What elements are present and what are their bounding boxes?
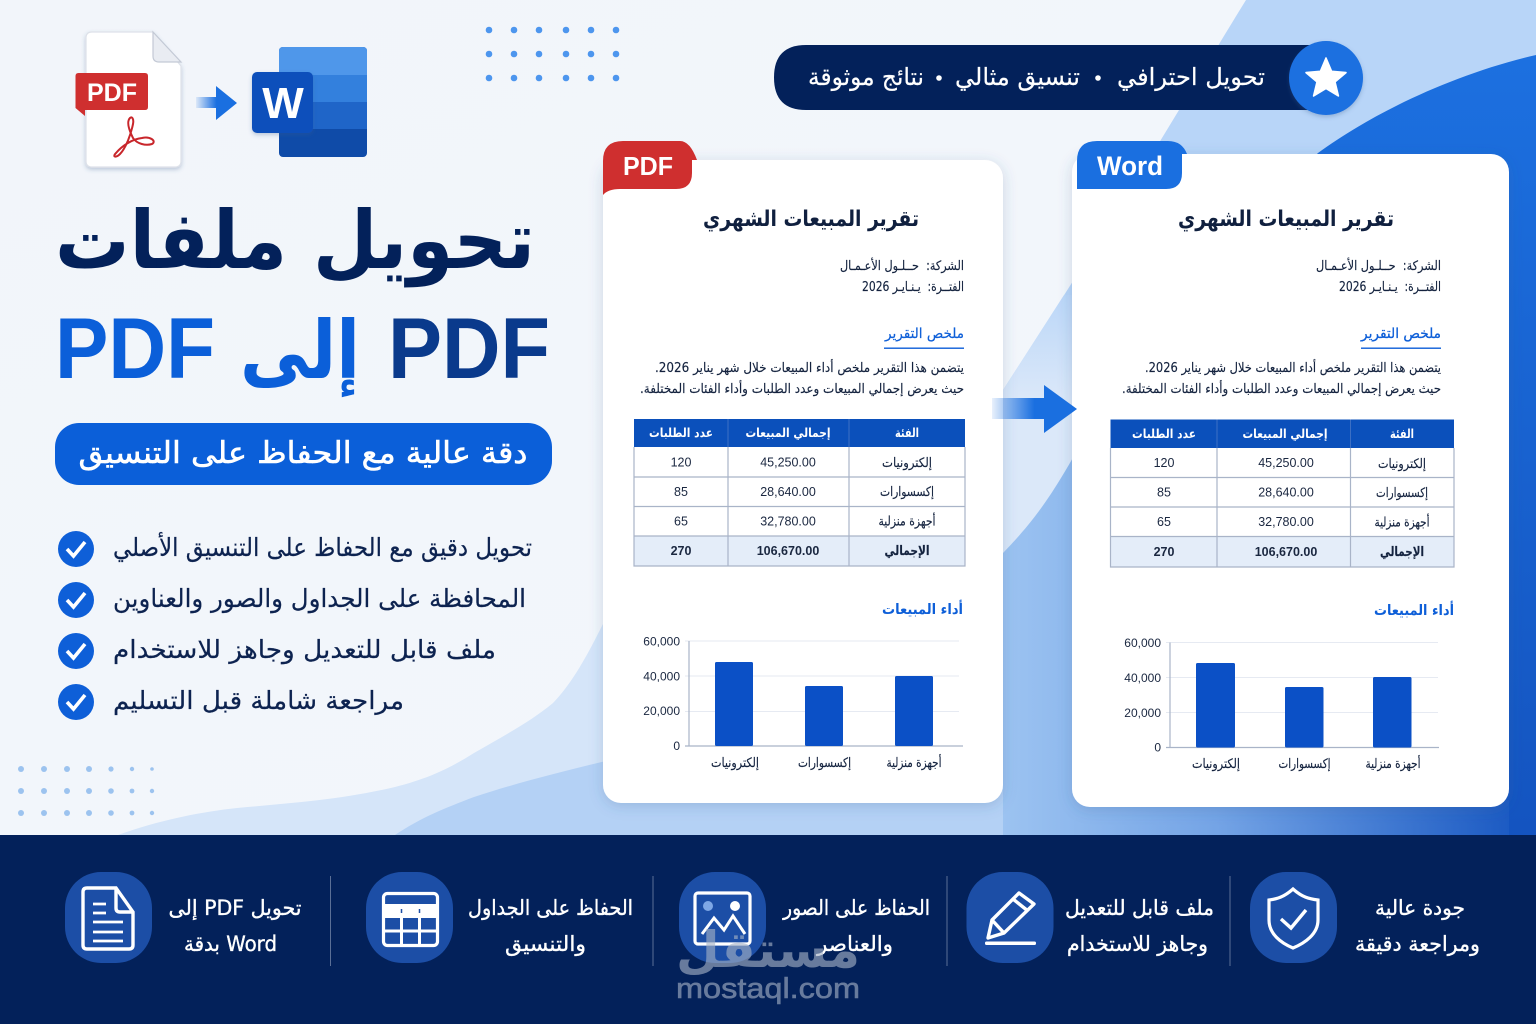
PDF tab: PDF <box>623 151 673 181</box>
summary heading <box>884 326 964 349</box>
watermark <box>676 921 860 1005</box>
table <box>634 419 965 566</box>
footer item: quality: جودة عالية <box>1375 896 1465 920</box>
report meta: الفتــرة: يـنـايـر 2026 <box>1339 280 1441 295</box>
title line 1: تحويل ملفات <box>55 194 535 288</box>
table: أجهزة منزلية <box>878 512 936 530</box>
bar chart: إكسسوارات <box>1278 757 1330 772</box>
report meta: الفتــرة: يـنـايـر 2026 <box>862 280 964 295</box>
arrow: between cards <box>992 385 1077 433</box>
bar chart: 40,000 <box>1124 671 1161 685</box>
table: عدد الطلبات <box>649 425 713 440</box>
table: 120 <box>671 456 691 470</box>
footer item: images: والعناصر <box>816 932 893 956</box>
bar chart: 20,000 <box>643 704 680 718</box>
table: 270 <box>671 544 691 558</box>
summary paragraph: حيث يعرض إجمالي المبيعات وعدد الطلبات وأداء الفئات المختلفة. <box>1122 380 1441 397</box>
table: 45,250.00 <box>1258 456 1314 470</box>
bar chart: إكسسوارات <box>798 756 851 771</box>
panel: Word document card <box>1072 141 1509 807</box>
feature list <box>58 531 532 720</box>
bar chart <box>643 634 963 771</box>
table: إكسسوارات <box>1376 486 1428 501</box>
summary paragraph: يتضمن هذا التقرير ملخص أداء المبيعات خلال شهر يناير 2026. <box>655 359 964 376</box>
table: الإجمالي <box>1380 545 1424 560</box>
summary heading: ملخص التقرير <box>884 326 964 342</box>
Word tab <box>1077 141 1187 189</box>
table: الإجمالي <box>884 544 930 559</box>
list item 3 <box>58 633 496 669</box>
table: 65 <box>674 514 688 528</box>
table: 106,670.00 <box>1255 545 1317 559</box>
title line 2: إلى <box>240 304 360 398</box>
report meta: الشركة: حــلـول الأعـمـال <box>840 257 964 274</box>
footer item: images <box>679 872 930 963</box>
bar chart <box>1124 636 1439 772</box>
footer bar <box>0 835 1536 1024</box>
subtitle pill <box>55 423 552 485</box>
table: 106,670.00 <box>757 544 819 558</box>
footer item: tables: والتنسيق <box>505 932 586 956</box>
icon: pencil <box>966 872 1054 963</box>
top banner pill: تنسيق مثالي <box>955 63 1080 91</box>
icon: PDF file: PDF <box>87 79 137 107</box>
bar chart: 60,000 <box>1124 636 1161 650</box>
icon: Word file: W <box>262 79 304 128</box>
bar chart: أجهزة منزلية <box>1366 755 1420 772</box>
bar chart: 40,000 <box>643 670 680 684</box>
chart heading: أداء المبيعات <box>1374 601 1454 619</box>
bar chart: 20,000 <box>1124 706 1161 720</box>
table: 32,780.00 <box>760 514 816 528</box>
bar chart: إلكترونيات <box>711 756 759 771</box>
table: إجمالي المبيعات <box>1242 426 1328 441</box>
footer item: tables <box>366 872 633 963</box>
footer item: tables: الحفاظ على الجداول <box>468 896 633 920</box>
list item 3: ملف قابل للتعديل وجاهز للاستخدام <box>113 635 496 665</box>
bar chart: إلكترونيات <box>1192 757 1240 772</box>
table: إكسسوارات <box>880 485 934 500</box>
footer item: editable <box>966 872 1214 963</box>
arrow: PDF to Word small <box>196 86 237 120</box>
table: 45,250.00 <box>760 456 816 470</box>
top banner pill <box>774 41 1363 115</box>
icon: Word file <box>252 47 367 157</box>
table: الفئة <box>1390 426 1414 441</box>
title line 2: PDF <box>55 301 215 397</box>
report title: تقرير المبيعات الشهري <box>703 207 919 232</box>
summary paragraph: حيث يعرض إجمالي المبيعات وعدد الطلبات وأداء الفئات المختلفة. <box>640 380 964 397</box>
summary paragraph <box>1122 359 1441 397</box>
table: إلكترونيات <box>882 456 932 471</box>
bar chart: 60,000 <box>643 634 680 648</box>
top dots decoration <box>486 27 619 81</box>
summary paragraph: يتضمن هذا التقرير ملخص أداء المبيعات خلال شهر يناير 2026. <box>1145 359 1441 376</box>
title line 2: PDF <box>388 301 550 397</box>
Word tab: Word <box>1097 151 1163 181</box>
bar chart: 0 <box>1154 740 1161 754</box>
footer item: editable: ملف قابل للتعديل <box>1065 896 1214 920</box>
panel: PDF document card <box>603 141 1003 803</box>
table: 85 <box>674 485 688 499</box>
icon: PDF file <box>76 32 181 167</box>
table: الفئة <box>895 425 919 440</box>
list item 4: مراجعة شاملة قبل التسليم <box>113 686 404 716</box>
table <box>1110 420 1454 567</box>
title line 2 <box>55 301 550 398</box>
report meta <box>1316 257 1441 295</box>
table: 32,780.00 <box>1258 515 1314 529</box>
list item 1: تحويل دقيق مع الحفاظ على التنسيق الأصلي <box>113 531 532 563</box>
chart heading: أداء المبيعات <box>882 600 963 618</box>
table: 85 <box>1157 486 1171 500</box>
table: إجمالي المبيعات <box>746 425 830 440</box>
table: عدد الطلبات <box>1132 426 1196 441</box>
list item 4 <box>58 684 404 720</box>
table: 120 <box>1154 456 1174 470</box>
report meta: الشركة: حــلـول الأعـمـال <box>1316 257 1441 274</box>
table: 65 <box>1157 515 1171 529</box>
report title: تقرير المبيعات الشهري <box>1178 207 1394 232</box>
footer item: PDF to Word: تحويل PDF إلى <box>168 896 302 921</box>
subtitle pill: دقة عالية مع الحفاظ على التنسيق <box>78 436 528 471</box>
list item 1 <box>58 531 532 567</box>
icon: image <box>679 872 766 963</box>
footer item: PDF to Word: Word بدقة <box>184 932 277 956</box>
top banner pill: تحويل احترافي <box>1117 63 1265 91</box>
watermark: mostaql.com <box>676 973 860 1005</box>
summary paragraph <box>640 359 964 397</box>
footer item: PDF to Word <box>65 872 302 963</box>
table: 270 <box>1154 545 1174 559</box>
icon: shield <box>1250 872 1337 963</box>
icon: star badge <box>1289 41 1363 115</box>
summary heading: ملخص التقرير <box>1360 326 1441 342</box>
bar chart: 0 <box>673 739 680 753</box>
footer item: images: الحفاظ على الصور <box>782 896 930 920</box>
table: 28,640.00 <box>760 485 816 499</box>
watermark: مستقل <box>676 921 860 979</box>
table: إلكترونيات <box>1378 457 1426 472</box>
icon: table <box>366 872 453 963</box>
bar chart: أجهزة منزلية <box>886 754 942 771</box>
PDF tab <box>603 141 697 195</box>
footer item: quality <box>1250 872 1480 963</box>
list item 2: المحافظة على الجداول والصور والعناوين <box>113 584 526 614</box>
bottom-left dots decoration <box>18 766 154 816</box>
footer item: editable: وجاهز للاستخدام <box>1067 932 1208 956</box>
table: 28,640.00 <box>1258 486 1314 500</box>
top banner pill: نتائج موثوقة <box>808 63 924 91</box>
report meta <box>840 257 964 295</box>
footer item: quality: ومراجعة دقيقة <box>1355 932 1480 956</box>
table: أجهزة منزلية <box>1374 514 1430 530</box>
summary heading <box>1360 326 1441 349</box>
icon: document <box>65 872 152 963</box>
